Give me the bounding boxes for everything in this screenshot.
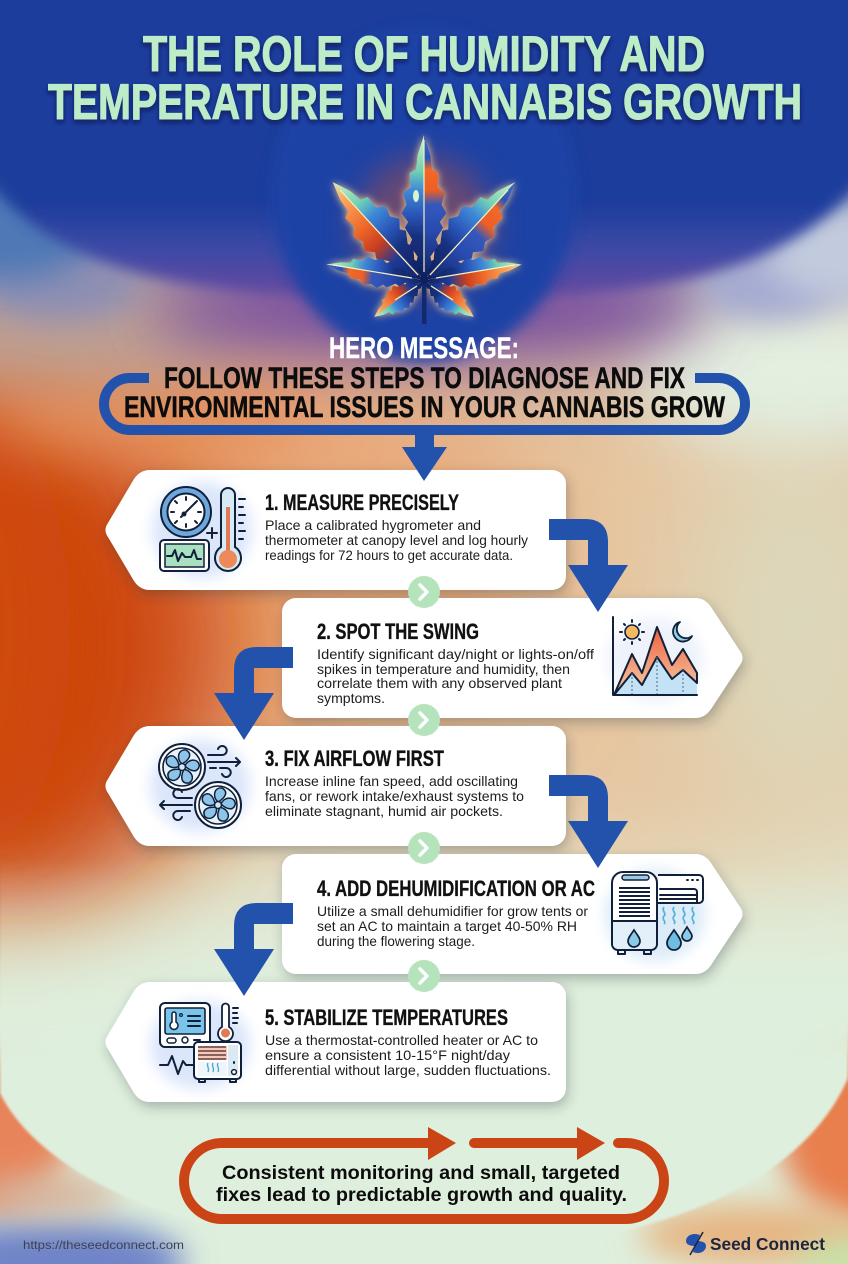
- leaflet: far right: [422, 249, 524, 295]
- step 5 body: [265, 1032, 551, 1078]
- connector: step 1 to 2: [408, 576, 440, 608]
- step 2 body: symptoms.: [317, 690, 385, 706]
- card shape: [282, 854, 742, 974]
- step 3 body: fans, or rework intake/exhaust systems to: [265, 788, 524, 804]
- arrow: step 3 to step 4: [549, 775, 628, 868]
- step 4 body: Utilize a small dehumidifier for grow tents or: [317, 903, 588, 919]
- title: [48, 26, 802, 130]
- card shape: [106, 982, 566, 1102]
- step 2 body: Identify significant day/night or lights-on/off: [317, 646, 594, 662]
- step 3 body: [265, 773, 524, 819]
- leaflet: lower right: [416, 269, 482, 328]
- icon: gauge, monitor and thermometer: [152, 482, 252, 578]
- panel: step 4 add dehumidification or ac: [282, 854, 742, 974]
- title: THE ROLE OF HUMIDITY AND: [143, 26, 705, 82]
- panel: step 3 fix airflow first: [106, 726, 566, 846]
- leaflet: far left: [324, 249, 426, 295]
- icon: fans and airflow: [150, 740, 250, 832]
- step 5 heading: 5. STABILIZE TEMPERATURES: [265, 1005, 508, 1030]
- step 5 body: Use a thermostat-controlled heater or AC to: [265, 1032, 538, 1048]
- hero message label: HERO MESSAGE:: [329, 332, 519, 365]
- step 1 body: [265, 517, 528, 563]
- closing message: Consistent monitoring and small, targeted: [222, 1162, 620, 1184]
- panel: step 1 measure precisely: [106, 470, 566, 590]
- step 1 body: thermometer at canopy level and log hourly: [265, 532, 528, 548]
- logo wordmark: Seed Connect: [710, 1234, 825, 1254]
- closing loop arrow: [184, 1127, 664, 1219]
- step 2 heading: 2. SPOT THE SWING: [317, 619, 479, 644]
- step 3 heading: 3. FIX AIRFLOW FIRST: [265, 746, 444, 771]
- step 4 body: [317, 903, 588, 949]
- connector: step 2 to 3: [408, 704, 440, 736]
- step 2 body: [317, 646, 594, 706]
- arrow: step 2 to step 3: [214, 647, 293, 740]
- card shape: [282, 598, 742, 718]
- icon: dehumidifier and air conditioner: [605, 869, 705, 961]
- logo: seed connect: [686, 1232, 825, 1255]
- step 2 body: correlate them with any observed plant: [317, 675, 562, 691]
- leaflet: top: [402, 135, 446, 280]
- step 4 heading: 4. ADD DEHUMIDIFICATION OR AC: [317, 876, 595, 901]
- hero message text: FOLLOW THESE STEPS TO DIAGNOSE AND FIX: [164, 362, 685, 395]
- panel: step 5 stabilize temperatures: [106, 982, 566, 1102]
- step 3 body: Increase inline fan speed, add oscillating: [265, 773, 518, 789]
- hero message text: [124, 362, 726, 424]
- step 5 body: differential without large, sudden fluctuations.: [265, 1062, 551, 1078]
- arrow: step 4 to step 5: [214, 903, 293, 996]
- leaflet: lower left: [366, 269, 432, 328]
- icon: cannabis leaf: [315, 135, 533, 328]
- closing message: [216, 1162, 627, 1206]
- panel: step 2 spot the swing: [282, 598, 742, 718]
- step 4 body: set an AC to maintain a target 40-50% RH: [317, 918, 577, 934]
- logo mark: [686, 1232, 706, 1255]
- leaflet: upper right: [407, 166, 533, 296]
- step 2 body: spikes in temperature and humidity, then: [317, 661, 570, 677]
- step 1 body: Place a calibrated hygrometer and: [265, 517, 481, 533]
- hero bracket: [104, 378, 745, 430]
- step 4 body: during the flowering stage.: [317, 933, 475, 949]
- arrow: step 1 to step 2: [549, 519, 628, 612]
- icon: thermostat and heater: [150, 1001, 250, 1089]
- step 1 heading: 1. MEASURE PRECISELY: [265, 490, 459, 515]
- footer url: https://theseedconnect.com: [23, 1238, 184, 1252]
- step 3 body: eliminate stagnant, humid air pockets.: [265, 803, 503, 819]
- leaflet: upper left: [315, 166, 441, 296]
- step 1 body: readings for 72 hours to get accurate data.: [265, 547, 513, 563]
- connector: step 4 to 5: [408, 960, 440, 992]
- step 5 body: ensure a consistent 10-15°F night/day: [265, 1047, 510, 1063]
- connector: step 3 to 4: [408, 832, 440, 864]
- arrow: hero to step 1: [402, 433, 447, 481]
- icon: day night chart: [607, 617, 703, 702]
- card shape: [106, 470, 566, 590]
- card shape: [106, 726, 566, 846]
- closing message: fixes lead to predictable growth and quality.: [216, 1184, 627, 1206]
